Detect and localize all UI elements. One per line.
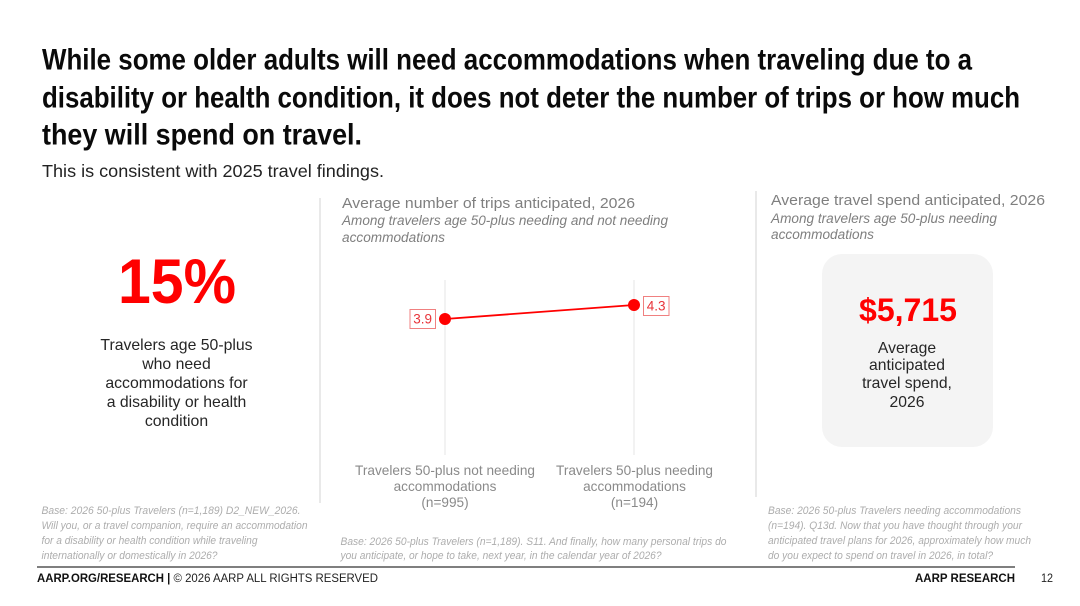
- stat description: accommodations for: [105, 375, 248, 392]
- panel: share needing accommodations: [42, 247, 308, 562]
- stat description: who need: [141, 356, 211, 373]
- base note: left: Will you, or a travel companion, require an accommodation: [42, 520, 308, 532]
- card description: anticipated: [869, 357, 945, 374]
- category label: needing: Travelers 50-plus needing: [556, 463, 713, 478]
- category label: needing: [556, 463, 713, 510]
- base note: left: [42, 505, 308, 562]
- title: While some older adults will need accommodations when traveling due to a: [42, 44, 973, 76]
- big stat: $5,715: $5,715: [859, 292, 957, 328]
- card description: [862, 340, 952, 411]
- panel: average travel spend: [768, 192, 1045, 562]
- panel heading: spend: Average travel spend anticipated, 2026: [771, 192, 1045, 209]
- panel subheading: trips: [341, 213, 668, 245]
- card description: travel spend,: [862, 375, 952, 392]
- subtitle: This is consistent with 2025 travel findings.: [42, 161, 384, 181]
- stat description: [100, 337, 253, 430]
- data point: not needing: [439, 313, 451, 325]
- base note: middle: Base: 2026 50-plus Travelers (n=1,189). S11. And finally, how many personal trips do: [340, 536, 726, 548]
- base note: middle: you anticipate, or hope to take, next year, in the calendar year of 2026?: [340, 550, 662, 562]
- value label: 3.9: 3.9: [413, 312, 432, 326]
- panel: average number of trips: [340, 195, 726, 562]
- card description: 2026: [890, 394, 925, 411]
- base note: right: Base: 2026 50-plus Travelers needing accommodations: [768, 505, 1021, 517]
- base note: right: [768, 505, 1031, 562]
- panel subheading: spend: Among travelers age 50-plus needing: [770, 211, 997, 226]
- line chart: [355, 280, 713, 510]
- category label: not needing: Travelers 50-plus not needing: [355, 463, 535, 478]
- title: they will spend on travel.: [42, 118, 362, 152]
- panel heading: trips: Average number of trips anticipated, 2026: [342, 195, 635, 212]
- category label: not needing: accommodations: [394, 479, 497, 494]
- page number: 12: [1041, 573, 1053, 585]
- category label: needing: accommodations: [583, 479, 686, 494]
- base note: middle: [340, 536, 726, 562]
- base note: right: (n=194). Q13d. Now that you have thought through your: [768, 520, 1023, 532]
- footer brand: AARP RESEARCH: [915, 573, 1015, 585]
- card description: Average: [878, 340, 936, 357]
- base note: right: anticipated travel plans for 2026, approximately how much: [768, 535, 1031, 547]
- big stat: 15%: 15%: [118, 247, 236, 317]
- base note: left: Base: 2026 50-plus Travelers (n=1,189) D2_NEW_2026.: [42, 505, 300, 517]
- base note: right: do you expect to spend on travel in 2026, in total?: [768, 550, 994, 562]
- panel subheading: trips: Among travelers age 50-plus needing and not needing: [341, 213, 668, 228]
- value label: 4.3: [644, 296, 669, 316]
- value label: 3.9: [410, 310, 436, 328]
- stat description: a disability or health: [107, 394, 246, 411]
- footer copyright: AARP.ORG/RESEARCH | © 2026 AARP ALL RIGHTS RESERVED: [37, 573, 378, 585]
- stat description: Travelers age 50-plus: [100, 337, 253, 354]
- base note: left: for a disability or health condition while traveling: [42, 535, 258, 547]
- category label: not needing: [355, 463, 535, 510]
- trend line: [445, 305, 634, 319]
- base note: left: internationally or domestically in 2026?: [42, 550, 218, 562]
- panel subheading: spend: [770, 211, 997, 242]
- value label: 4.3: 4.3: [647, 298, 666, 314]
- category label: needing: (n=194): [611, 495, 658, 510]
- panel subheading: trips: accommodations: [342, 230, 445, 245]
- stat description: condition: [145, 413, 208, 430]
- category label: not needing: (n=995): [421, 495, 469, 510]
- footer: [37, 573, 1053, 585]
- data point: needing: [628, 299, 640, 311]
- title: [42, 44, 1020, 152]
- panel subheading: spend: accommodations: [771, 227, 874, 242]
- card: spend stat: [822, 254, 993, 447]
